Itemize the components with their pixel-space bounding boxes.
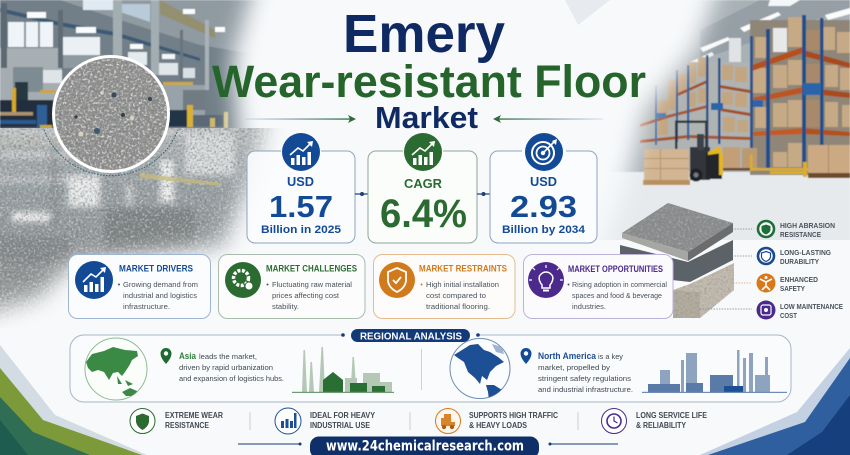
feature: durability: DURABILITY: [780, 257, 819, 266]
feature: extreme wear resistance: EXTREME WEAR: [165, 411, 223, 420]
panel: market opportunities: [524, 254, 673, 318]
KPI card: 2025 value: [247, 133, 355, 243]
panel: market drivers: infrastructure.: [123, 302, 170, 311]
website bar: [238, 436, 618, 455]
feature: high traffic: [436, 408, 558, 434]
feature: high abrasion: HIGH ABRASION: [780, 221, 835, 230]
photo: warehouse racks right: [607, 0, 850, 240]
text: North America: North America: [538, 351, 597, 361]
feature: durability: [758, 248, 831, 266]
forklift: [675, 120, 723, 182]
panel: market restraints: cost compared to: [426, 291, 486, 300]
connector: [477, 192, 490, 196]
KPI card: 2034 value: [490, 133, 597, 243]
panel: market challenges: Fluctuating raw material: [272, 280, 352, 289]
feature: long service life: [602, 408, 708, 434]
globe: Asia: [85, 338, 147, 400]
KPI card: 2034 value: Billion by 2034: [502, 224, 586, 236]
feature: extreme wear resistance: RESISTANCE: [165, 421, 210, 430]
panel: market challenges: prices affecting cost: [272, 291, 340, 300]
panel: regional analysis: [70, 329, 791, 402]
panel: market restraints: High initial installation: [426, 280, 499, 289]
text: North America: is a key: [598, 352, 623, 361]
illustration: Asia industry skyline: [292, 347, 394, 393]
text: North America: stringent safety regulations: [538, 374, 631, 383]
panel: market challenges: MARKET CHALLENGES: [266, 264, 357, 274]
panel: market restraints: MARKET RESTRAINTS: [419, 264, 507, 274]
connector: [355, 192, 368, 196]
website bar: www.24chemicalresearch.com: [326, 438, 524, 454]
text: Asia: leads the market,: [199, 352, 257, 361]
KPI card: 2034 value: USD: [530, 175, 557, 189]
stacked concrete slabs: [620, 203, 734, 318]
icon: North America pin: [520, 348, 532, 364]
icon: Asia pin: [160, 348, 172, 364]
title: [212, 4, 646, 135]
panel: market opportunities: spaces and food & beverage: [572, 291, 662, 300]
slab callout lines: [700, 229, 752, 309]
feature: high traffic: SUPPORTS HIGH TRAFFIC: [469, 411, 558, 420]
title: Market: [375, 100, 478, 135]
feature: low maintenance: [756, 300, 843, 320]
panel: market challenges: stability.: [272, 302, 299, 311]
near rack: [723, 15, 850, 178]
KPI card: CAGR: CAGR: [404, 176, 443, 191]
KPI card: 2025 value: Billion in 2025: [261, 224, 341, 236]
feature: heavy industrial use: [275, 408, 376, 434]
icon: gears: [225, 262, 261, 298]
far rack: [640, 55, 752, 148]
concrete sample circle: [44, 55, 178, 176]
text: Asia: [179, 351, 284, 383]
corner: right blue chevrons: [700, 348, 850, 455]
panel: market restraints: traditional flooring.: [426, 302, 490, 311]
feature: safety: [756, 274, 819, 293]
icon: growth chart: [75, 261, 113, 299]
panel: market opportunities: MARKET OPPORTUNITIES: [568, 264, 663, 274]
feature: safety: SAFETY: [780, 284, 805, 293]
corner: left green chevrons: [0, 345, 147, 455]
floor surface: [0, 126, 278, 324]
feature: durability: LONG-LASTING: [780, 248, 831, 257]
title: Wear-resistant Floor: [212, 56, 646, 107]
panel: market drivers: Growing demand from: [123, 280, 198, 289]
feature: extreme wear resistance: [130, 408, 223, 434]
text: North America: [538, 351, 633, 394]
KPI card: CAGR: 6.4%: [380, 192, 467, 236]
light wash behind title: [565, 0, 610, 25]
KPI card: 2034 value: 2.93: [510, 189, 577, 224]
panel: market opportunities: industries.: [572, 302, 606, 311]
KPI card: 2025 value: USD: [287, 175, 314, 189]
panel: market challenges: [218, 254, 365, 318]
icon: shield: [379, 262, 415, 298]
panel: market drivers: [68, 254, 210, 318]
globe: North America: [450, 338, 510, 400]
panel: market opportunities: Rising adoption in commercial: [572, 280, 667, 289]
photo: factory interior left: [0, 0, 264, 128]
title: Emery: [343, 4, 505, 64]
text: Asia: and expansion of logistics hubs.: [179, 374, 284, 383]
illustration: North America industry skyline: [642, 350, 787, 393]
feature: safety: ENHANCED: [780, 275, 819, 284]
feature: heavy industrial use: IDEAL FOR HEAVY: [310, 411, 376, 420]
panel: market drivers: MARKET DRIVERS: [119, 264, 193, 274]
text: North America: market, propelled by: [538, 363, 610, 372]
feature: long service life: & RELIABILITY: [636, 421, 687, 430]
panel: market drivers: industrial and logistics: [123, 291, 197, 300]
text: North America: and industrial infrastructure.: [538, 385, 633, 394]
arrow: title right: [493, 115, 603, 123]
arrow: title left: [245, 115, 356, 123]
text: Asia: driven by rapid urbanization: [179, 363, 273, 372]
panel: market restraints: [374, 254, 515, 318]
feature: high traffic: & HEAVY LOADS: [469, 421, 528, 430]
icon: light bulb: [528, 262, 564, 298]
feature: heavy industrial use: INDUSTRIAL USE: [310, 421, 371, 430]
regional heading: REGIONAL ANALYSIS: [360, 332, 462, 342]
feature: low maintenance: COST: [780, 311, 797, 320]
feature: high abrasion: RESISTANCE: [780, 230, 821, 239]
KPI card: 2025 value: 1.57: [269, 189, 333, 224]
KPI card: CAGR: [368, 133, 477, 243]
text: Asia: Asia: [179, 351, 197, 362]
feature: long service life: LONG SERVICE LIFE: [636, 411, 708, 420]
feature: high abrasion: [758, 221, 835, 239]
